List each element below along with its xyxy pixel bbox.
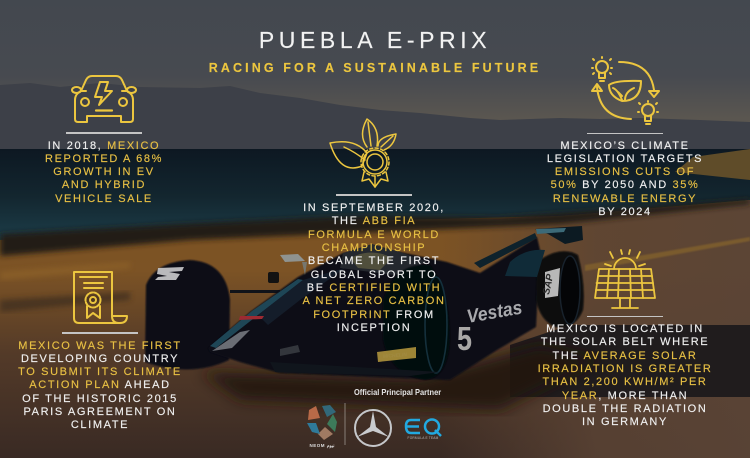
icon: cycle with bulbs and leaf [591,56,660,125]
logo: Mercedes star [354,409,392,447]
text: climate action plan: CLIMATE [71,419,129,431]
text: net zero certification: BE CERTIFIED WITH [307,282,441,294]
text: net zero certification: CHAMPIONSHIP [322,242,426,254]
text: EV growth: REPORTED A 68% [45,153,163,165]
divider [587,132,663,134]
text: EV growth [45,140,163,205]
car sponsor marks: SAP [541,273,556,296]
text: solar belt: YEAR, MORE THAN [562,390,688,402]
text: climate action plan: TO SUBMIT ITS CLIMATE [18,366,182,378]
text: climate action plan: ACTION PLAN AHEAD [29,379,171,391]
car sponsor marks: Vestas [465,298,524,328]
logo: NEOM [307,403,346,449]
text: climate legislation: MEXICO’S CLIMATE [560,140,690,152]
panel: EV growth [45,75,163,205]
text: solar belt [538,323,712,428]
text: EV growth: GROWTH IN EV [53,166,155,178]
car sponsor marks: MICHELIN [383,352,408,360]
text: solar belt: MEXICO IS LOCATED IN [546,323,704,335]
text: climate legislation [547,140,703,218]
text: net zero certification: THE ABB FIA [332,215,416,227]
text: net zero certification: IN SEPTEMBER 2020, [303,202,445,214]
text: solar belt: DOUBLE THE RADIATION [543,403,707,415]
icon: electric car [71,75,137,123]
logo: NEOM: NEOM نيوم [310,443,335,449]
race car [145,226,584,380]
divider [66,132,142,134]
text: climate legislation: BY 2024 [598,206,652,218]
partner logos [307,387,442,449]
subtitle: RACING FOR A SUSTAINABLE FUTURE [209,61,541,75]
panel: climate legislation [547,56,703,218]
text: net zero certification: BECAME THE FIRST [308,255,440,267]
divider [336,194,412,196]
text: climate legislation: EMISSIONS CUTS OF [555,166,695,178]
divider [62,332,138,334]
text: climate legislation: LEGISLATION TARGETS [547,153,703,165]
text: climate action plan: DEVELOPING COUNTRY [21,353,179,365]
text: solar belt: THE AVERAGE SOLAR [553,350,697,362]
text: climate action plan: MEXICO WAS THE FIRST [18,340,182,352]
text: EV growth: IN 2018, MEXICO [48,140,160,152]
text: climate legislation: RENEWABLE ENERGY [553,193,697,205]
text: EV growth: VEHICLE SALE [55,193,153,205]
text: net zero certification: FORMULA E WORLD [308,229,440,241]
panel: net zero certification [302,118,446,334]
text: net zero certification: FOOTPRINT FROM [313,309,435,321]
text: net zero certification: GLOBAL SPORT TO [311,269,437,281]
icon: solar panel with sun [594,249,656,309]
text: solar belt: IN GERMANY [582,416,668,428]
logo: EQ Formula E team [404,418,442,440]
car sponsor marks [383,273,556,360]
text: EV growth: AND HYBRID [62,179,146,191]
text: climate action plan [18,340,182,431]
text: climate legislation: 50% BY 2050 AND 35% [551,179,699,191]
text: net zero certification: A NET ZERO CARBON [302,295,446,307]
car sponsor marks: 5 [457,320,472,357]
text: solar belt: IRRADIATION IS GREATER [538,363,712,375]
title: PUEBLA E-PRIX [259,26,491,52]
icon: certificate scroll [73,271,128,324]
text: solar belt: THE SOLAR BELT WHERE [541,336,709,348]
panel: climate action plan [18,271,182,431]
text: climate action plan: PARIS AGREEMENT ON [23,406,176,418]
logo: EQ Formula E team: FORMULA E TEAM [408,436,439,440]
text: net zero certification [302,202,446,334]
divider [587,316,663,317]
icon: leaves and medal [329,118,397,188]
text: solar belt: THAN 2,200 KWH/M² PER [542,376,708,388]
panel: solar belt [538,249,712,428]
text: climate action plan: OF THE HISTORIC 2015 [22,393,178,405]
partner label: Official Principal Partner [354,387,441,397]
text: net zero certification: INCEPTION [337,322,411,334]
